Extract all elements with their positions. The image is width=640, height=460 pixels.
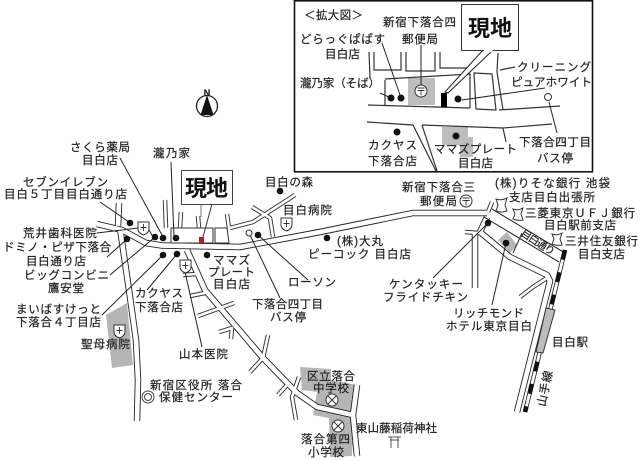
- label: smbc bank: [565, 234, 638, 261]
- icon: ward office: [142, 391, 154, 403]
- inset site callout: [445, 4, 518, 93]
- label: mufj bank: 目白駅前支店: [544, 218, 616, 232]
- label: mamas plate: プレート: [208, 266, 255, 279]
- inset shop dots: [388, 94, 462, 140]
- label: sakura pharmacy: [70, 141, 130, 167]
- label: kakuyasu: カクヤス: [135, 287, 183, 300]
- label: post office: [383, 15, 456, 46]
- panel: enlarged inset map: [294, 1, 592, 172]
- leader lines: [97, 158, 506, 347]
- label: kakuyasu: 下落合店: [135, 301, 183, 314]
- label: takino-ya: 瀧乃家（そば）: [300, 76, 380, 90]
- gray area: schools: [300, 367, 357, 457]
- label: mufj bank: [525, 206, 635, 232]
- label: kakuyasu: [135, 287, 183, 314]
- label: sakura pharmacy: 目白店: [82, 153, 118, 167]
- label: kfc: ケンタッキー: [389, 278, 463, 291]
- label: big convenience: 鷹安堂: [48, 282, 84, 295]
- icon: hospital shields: [114, 218, 292, 338]
- label: post office east: [402, 180, 475, 208]
- label: maibasket: まいばすけっと: [16, 303, 101, 316]
- site marker: [199, 237, 204, 243]
- icon: bank markers: [496, 198, 562, 245]
- label: higashiyama shrine: 東山藤稲荷神社: [356, 421, 438, 435]
- station: mejiro platform: [536, 308, 555, 353]
- icon: shrine gate: [388, 437, 401, 448]
- label: resona bank: (株)りそな銀行 池袋: [495, 176, 610, 190]
- label: ward health center: 新宿区役所 落合: [150, 378, 242, 392]
- label: richmond hotel: リッチモンド: [453, 307, 524, 320]
- label: yamanote line: 山手線: [534, 369, 556, 408]
- label: big convenience: [24, 268, 109, 295]
- label: maibasket: 下落合４丁目店: [16, 316, 101, 329]
- icon: inset bus stop: [544, 94, 552, 100]
- label: lawson: ローソン: [288, 277, 336, 289]
- icon: post office: [415, 85, 427, 97]
- label: kfc: [383, 278, 468, 304]
- label: mamas plate: 目白店: [213, 277, 250, 291]
- railway: yamanote line: [525, 250, 565, 412]
- label: ward health center: 保健センター: [159, 390, 233, 404]
- icon: north compass: [196, 88, 218, 116]
- road network: [97, 195, 565, 456]
- label: kakuyasu: カクヤス: [368, 139, 417, 152]
- label: mamas plate: [434, 142, 517, 170]
- label: ochiai junior high: [307, 369, 356, 395]
- label: post office east: 新宿下落合三: [402, 180, 475, 194]
- label: peacock: (株)大丸: [337, 234, 384, 248]
- label: arai dental: 荒井歯科医院: [23, 226, 98, 240]
- site callout: 現地: [185, 176, 228, 201]
- label: bus stop: バス停: [270, 311, 306, 324]
- icon: post office east: [460, 195, 472, 207]
- label: post office: 郵便局: [402, 33, 438, 46]
- label: takino-ya: 瀧乃家: [153, 146, 190, 160]
- label: kakuyasu: [368, 139, 417, 168]
- label: ochiai elementary: 落合第四: [301, 432, 350, 446]
- label: ward health center: [150, 378, 242, 404]
- label: drug papas: [300, 33, 385, 61]
- label: mamas plate: 目白店: [458, 156, 493, 170]
- label: mamas plate: [208, 253, 255, 291]
- label: peacock: [308, 234, 411, 261]
- shop dots: [124, 188, 509, 258]
- site callout: [182, 170, 232, 237]
- label: sakura pharmacy: さくら薬局: [70, 141, 130, 154]
- label: peacock: ピーコック 目白店: [308, 247, 411, 261]
- label: yamamoto clinic: 山本医院: [179, 347, 228, 361]
- inset site marker: [441, 93, 447, 107]
- label: cleaning: [511, 60, 592, 89]
- label: bus stop: 下落合四丁目: [519, 136, 591, 149]
- label: drug papas: 目白店: [325, 47, 360, 61]
- label: big convenience: ビッグコンビニ: [24, 268, 109, 282]
- inset leader lines: [380, 43, 557, 133]
- label: bus stop: [519, 136, 591, 165]
- label: seven eleven: セブンイレブン: [23, 175, 108, 189]
- gray area: hotel: [498, 232, 517, 253]
- label: resona bank: [495, 176, 610, 204]
- label: mufj bank: 三菱東京ＵＦＪ銀行: [525, 206, 635, 220]
- label: richmond hotel: ホテル東京目白: [446, 319, 532, 333]
- label: mamas plate: ママズ: [213, 253, 250, 267]
- label: mejiro street: 目白通り: [518, 227, 557, 258]
- inset gray blocks: [408, 78, 473, 157]
- label: mejiro hospital: 目白病院: [283, 203, 332, 217]
- label: maibasket: [16, 303, 101, 329]
- label: cleaning: クリーニング: [517, 60, 592, 74]
- label: kfc: フライドチキン: [383, 291, 468, 304]
- inset site callout: 現地: [468, 16, 512, 41]
- label: domino pizza: ドミノ・ピザ下落合: [3, 241, 112, 254]
- label: bus stop: 下落合四丁目: [252, 298, 323, 311]
- label: mamas plate: ママズプレート: [434, 142, 517, 156]
- label: mejiro no mori: 目白の森: [265, 175, 314, 189]
- label: domino pizza: [3, 241, 112, 268]
- label: bus stop: [252, 298, 323, 324]
- icon: bus stop: [246, 230, 252, 236]
- label: ochiai junior high: 中学校: [313, 381, 350, 395]
- label: ochiai elementary: 小学校: [308, 445, 344, 459]
- label: bus stop: バス停: [537, 152, 574, 165]
- label: resona bank: 支店目白出張所: [509, 190, 596, 204]
- icon: north compass: N: [204, 88, 210, 98]
- inset roads: [367, 52, 560, 171]
- label: post office: 新宿下落合四: [383, 15, 456, 29]
- label: seven eleven: [4, 175, 127, 201]
- icon: schools: [326, 394, 344, 432]
- label: mejiro station: 目白駅: [552, 335, 588, 349]
- label: ochiai junior high: 区立落合: [307, 369, 356, 383]
- label: seibo hospital: 聖母病院: [81, 338, 130, 351]
- label: kakuyasu: 下落合店: [368, 155, 417, 168]
- label: drug papas: どらっぐぱぱす: [300, 33, 385, 46]
- inset heading: ＜拡大図＞: [304, 8, 363, 22]
- gray area: seibo hospital: [106, 303, 133, 368]
- label: richmond hotel: [446, 307, 532, 333]
- label: post office east: 郵便局: [420, 195, 457, 208]
- label: seven eleven: 目白５丁目目白通り店: [4, 187, 127, 201]
- label: domino pizza: 目白通り店: [26, 254, 86, 268]
- label: smbc bank: 三井住友銀行: [565, 234, 638, 248]
- label: cleaning: ピュアホワイト: [511, 76, 592, 89]
- label: smbc bank: 目白支店: [578, 247, 625, 261]
- label: ochiai elementary: [301, 432, 350, 459]
